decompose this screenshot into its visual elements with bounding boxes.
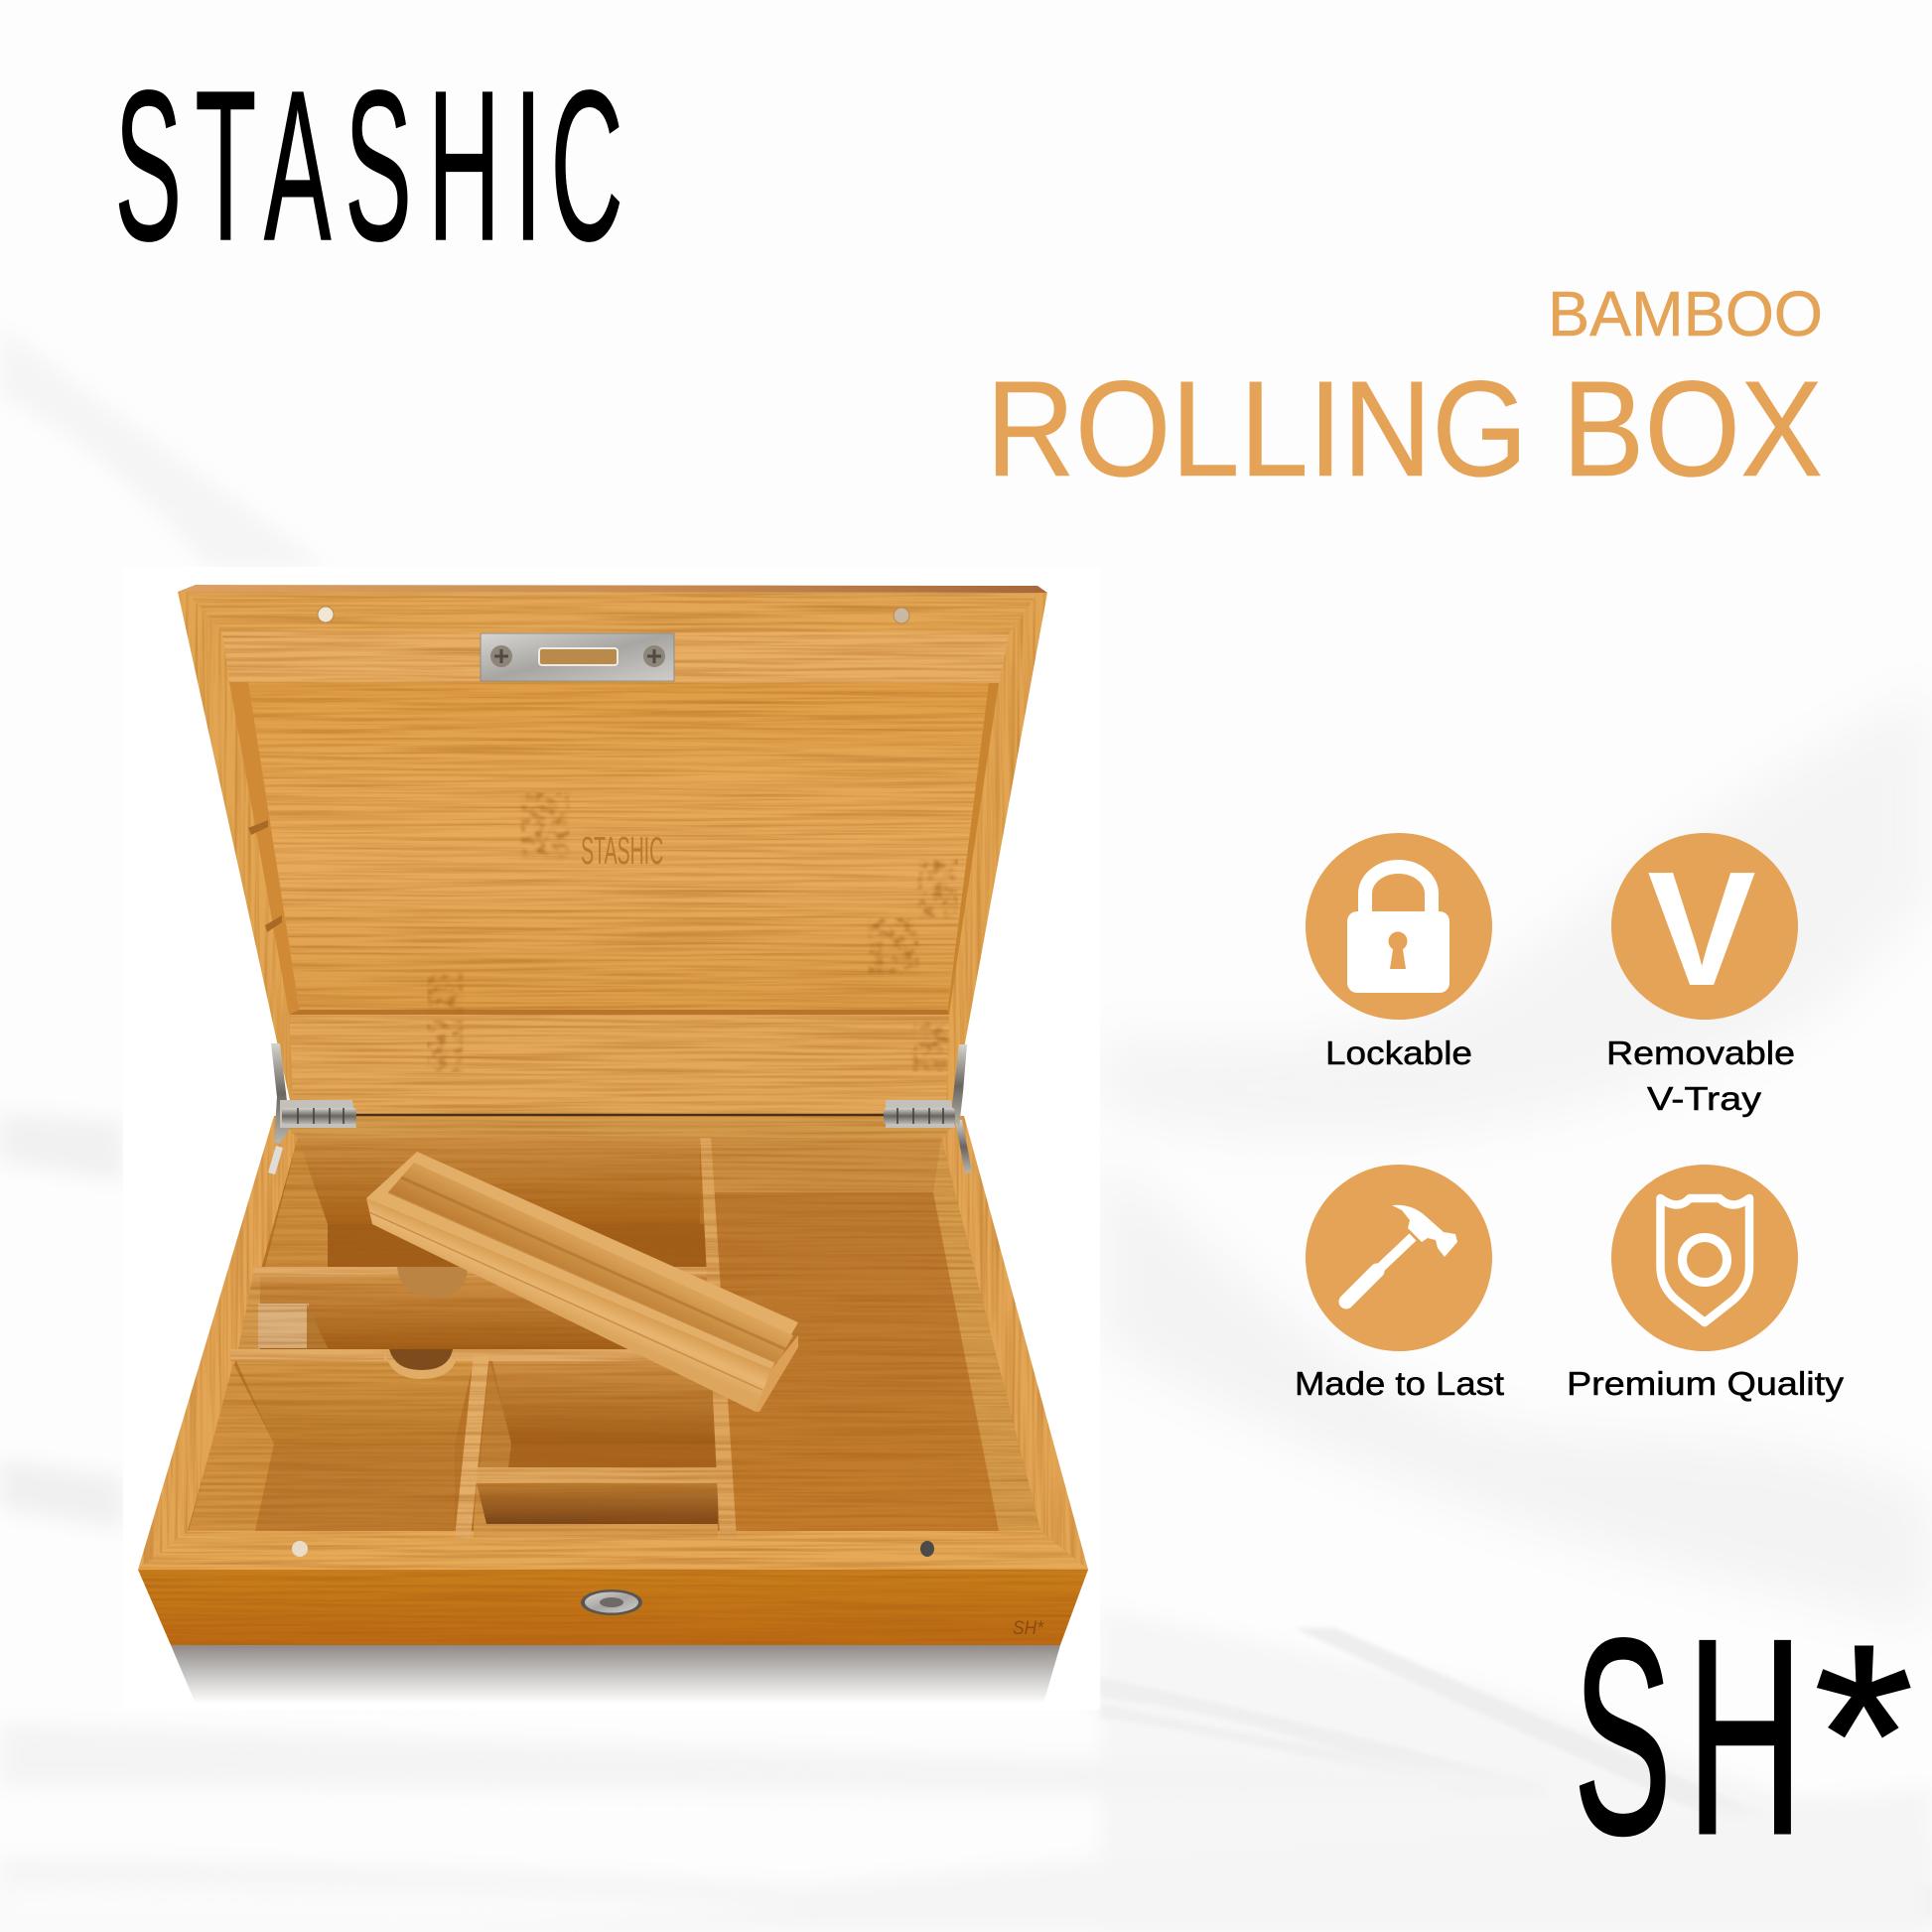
icon: V: V xyxy=(1647,838,1756,1020)
label xyxy=(1606,1035,1795,1117)
brand mark: SH*: S xyxy=(1574,1582,1672,1892)
brand logo: STASHIC: STASHIC xyxy=(115,46,623,285)
right hinge xyxy=(884,1044,967,1128)
heading: ROLLING BOX: ROLLING BOX xyxy=(986,353,1823,505)
label: Made to Last xyxy=(1295,1365,1504,1402)
ledge notches in lid xyxy=(248,820,282,932)
brand mark: SH* xyxy=(1574,1582,1913,1892)
icon: hammer xyxy=(1306,1165,1492,1351)
feature: Premium Quality xyxy=(1567,1165,1845,1402)
icon: shield xyxy=(1611,1165,1798,1351)
brand mark: SH*: * xyxy=(1814,1590,1913,1877)
label: Lockable xyxy=(1325,1035,1472,1071)
hinge seam xyxy=(338,1114,894,1116)
heading: BAMBOO: BAMBOO xyxy=(1548,278,1823,349)
photo backdrop xyxy=(123,567,1100,1710)
lock strike plate xyxy=(481,633,674,681)
box base xyxy=(138,1116,1088,1645)
brand mark: SH*: H xyxy=(1687,1582,1803,1892)
feature: Removable V-Tray xyxy=(1606,833,1798,1117)
icon: padlock xyxy=(1306,833,1492,1020)
feature: Lockable xyxy=(1306,833,1492,1071)
engraved SH* on front face: SH* xyxy=(1013,1618,1044,1639)
right strap lower xyxy=(955,1120,972,1173)
label: Premium Quality xyxy=(1567,1365,1845,1402)
lid xyxy=(178,592,1047,1114)
lid top edge xyxy=(178,585,1047,593)
reflection under box xyxy=(171,1645,1060,1704)
magnets in lid xyxy=(318,607,909,623)
magnets on box rim xyxy=(292,1541,934,1557)
latch on left rim xyxy=(268,1146,283,1174)
engraved STASHIC on lid: STASHIC xyxy=(581,830,663,873)
bamboo node marks on lid xyxy=(427,792,958,1072)
label: Removable xyxy=(1606,1035,1795,1071)
divider finger notches xyxy=(384,1267,468,1379)
label: V-Tray xyxy=(1647,1080,1762,1117)
feature: Made to Last xyxy=(1295,1165,1504,1402)
icon: V xyxy=(1611,833,1798,1020)
lock cylinder xyxy=(581,1589,642,1615)
product photo: open bamboo rolling box xyxy=(138,585,1088,1704)
left hinge xyxy=(271,1043,356,1144)
removable V-tray xyxy=(366,1152,798,1412)
